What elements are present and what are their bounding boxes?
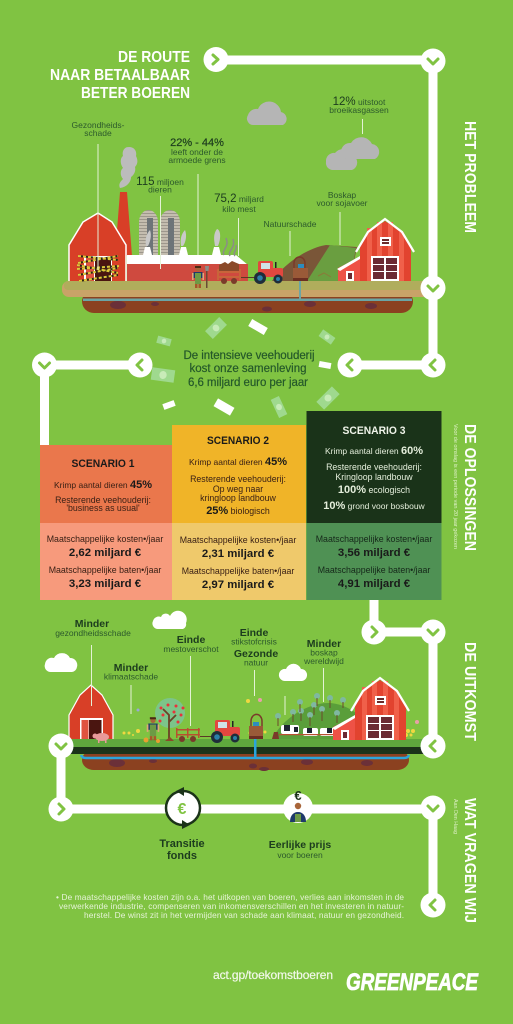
cost statement bbox=[184, 350, 314, 389]
label: 22-44%: 22% - 44% bbox=[170, 137, 224, 149]
label: 22-44%: leeft onder de bbox=[171, 147, 223, 157]
panel: scenario 2: Op weg naar bbox=[213, 484, 263, 494]
panel: scenario 1 bbox=[40, 445, 172, 600]
section label: wat vragen wij: WAT VRAGEN WIJ bbox=[461, 798, 478, 923]
ground platform bbox=[62, 281, 430, 313]
section label: de oplossingen: Voor de omslag is een periode van 20 jaar gekozen bbox=[452, 424, 458, 549]
label: einde stikstofcrisis, gezonde natuur bbox=[231, 627, 278, 696]
label: minder boskap wereldwijd: Minder bbox=[307, 638, 341, 650]
panel: scenario 3: Krimp aantal dieren 60% bbox=[325, 445, 423, 457]
apple tree bbox=[155, 698, 185, 741]
label: einde mestoverschot: Einde bbox=[177, 634, 205, 646]
well bbox=[249, 714, 263, 739]
label: eerlijke prijs: Eerlijke prijs bbox=[269, 839, 331, 851]
clouds: emissions bbox=[247, 102, 379, 170]
panel: scenario 3: Maatschappelijke baten•/jaar bbox=[318, 565, 430, 575]
white clouds bbox=[45, 611, 307, 681]
label: einde mestoverschot: mestoverschot bbox=[163, 644, 219, 654]
label: 12% uitstoot bbox=[329, 96, 389, 134]
label: minder klimaatschade: klimaatschade bbox=[104, 672, 158, 682]
label: gezondheidsschade bbox=[72, 120, 125, 270]
label: minder boskap wereldwijd: boskap bbox=[310, 648, 338, 658]
label: minder boskap wereldwijd bbox=[285, 638, 344, 715]
icon: fair price farmer: € bbox=[294, 788, 302, 803]
barn bbox=[332, 678, 409, 740]
label: 115 miljoen: dieren bbox=[148, 184, 172, 194]
problem scene bbox=[62, 147, 430, 313]
section label: het probleem: HET PROBLEEM bbox=[461, 121, 478, 233]
label: 115 miljoen bbox=[136, 176, 184, 269]
panel: scenario 3: 4,91 miljard € bbox=[338, 578, 411, 590]
tractor bbox=[211, 720, 240, 743]
panel: scenario 2: kringloop landbouw bbox=[200, 493, 277, 503]
logo: greenpeace: GREENPEACE bbox=[346, 969, 479, 996]
cost statement: 6,6 miljard euro per jaar bbox=[188, 377, 308, 389]
footnote: verwerkende industrie, compenseren van inkomensverschillen en het investeren in natuur- bbox=[59, 901, 404, 911]
section label: de oplossingen: DE OPLOSSINGEN bbox=[461, 424, 478, 551]
label: 75,2 miljard: kilo mest bbox=[222, 204, 256, 214]
section label: wat vragen wij bbox=[452, 798, 478, 923]
panel: scenario 3: SCENARIO 3 bbox=[342, 425, 406, 437]
well bbox=[293, 257, 308, 281]
label: boskap bbox=[316, 190, 368, 245]
label: einde mestoverschot bbox=[163, 634, 219, 726]
section label: de uitkomst: DE UITKOMST bbox=[461, 642, 478, 741]
ground platform bbox=[64, 739, 430, 771]
panel: scenario 2: Maatschappelijke baten•/jaar bbox=[182, 566, 294, 576]
barn with pig bbox=[69, 685, 113, 743]
label: transitie fonds: Transitie bbox=[159, 838, 205, 850]
panel: scenario 3: 10% grond voor bosbouw bbox=[323, 500, 426, 512]
label: einde stikstofcrisis, gezonde natuur: Einde bbox=[240, 627, 268, 639]
farmer with chickens bbox=[144, 717, 160, 743]
label: einde stikstofcrisis, gezonde natuur: natuur bbox=[244, 658, 268, 668]
farmer with shovel bbox=[192, 266, 209, 288]
sealed barn with tape bbox=[69, 213, 126, 281]
panel: scenario 1: Maatschappelijke baten•/jaar bbox=[49, 565, 161, 575]
icon: fair price farmer bbox=[283, 788, 313, 823]
panel: scenario 3: Kringloop landbouw bbox=[335, 472, 413, 482]
section label: wat vragen wij: Aan Den Haag bbox=[452, 799, 458, 834]
panel: scenario 3 bbox=[306, 411, 442, 600]
title: BETER BOEREN bbox=[81, 85, 190, 102]
panel: scenario 2: SCENARIO 2 bbox=[207, 435, 269, 447]
barn bbox=[337, 219, 414, 281]
footnote: • De maatschappelijke kosten zijn o.a. het uitkopen van boeren, verlies aan inkomsten in de bbox=[56, 892, 404, 902]
panel: scenario 2 bbox=[172, 425, 306, 600]
icon: transition fund bbox=[166, 787, 200, 829]
label: 22-44% bbox=[168, 137, 226, 255]
panel: scenario 2: 25% biologisch bbox=[206, 505, 270, 517]
panel: scenario 3: Maatschappelijke kosten•/jaar bbox=[316, 534, 432, 544]
label: eerlijke prijs: voor boeren bbox=[277, 850, 323, 860]
footnote: herstel. De winst zit in het vermijden van schade aan klimaat, natuur en gezondheid. bbox=[84, 910, 404, 920]
label: 12% uitstoot: 12% uitstoot bbox=[333, 96, 386, 108]
url: act.gp/toekomstboeren bbox=[213, 968, 333, 982]
route path lines bbox=[44, 60, 433, 905]
panel: scenario 2: Resterende veehouderij: bbox=[190, 474, 286, 484]
forest hill bbox=[272, 693, 356, 739]
panel: scenario 2: 2,31 miljard € bbox=[202, 548, 275, 560]
panel: scenario 1: SCENARIO 1 bbox=[72, 458, 134, 470]
outcome scene bbox=[64, 678, 430, 771]
cart bbox=[176, 728, 213, 742]
chimney with smoke bbox=[115, 147, 137, 256]
icon: transition fund: € bbox=[178, 801, 187, 818]
section label: de oplossingen bbox=[452, 424, 478, 551]
title: DE ROUTE bbox=[118, 49, 190, 66]
label: transitie fonds: fonds bbox=[167, 850, 197, 862]
cost statement: De intensieve veehouderij bbox=[184, 350, 314, 362]
label: 12% uitstoot: broeikasgassen bbox=[329, 105, 389, 115]
label: minder klimaatschade bbox=[104, 662, 158, 714]
label: eerlijke prijs bbox=[269, 839, 331, 860]
label: minder gezondheidsschade: gezondheidsschade bbox=[55, 628, 131, 638]
cows with fence bbox=[272, 725, 335, 739]
panel: scenario 2: 2,97 miljard € bbox=[202, 579, 275, 591]
label: minder boskap wereldwijd: wereldwijd bbox=[303, 656, 344, 666]
panel: scenario 1: 2,62 miljard € bbox=[69, 547, 142, 559]
label: 22-44%: armoede grens bbox=[168, 155, 226, 165]
hill with deforestation bbox=[272, 245, 357, 281]
label: 115 miljoen: 115 miljoen bbox=[136, 176, 184, 188]
factory bbox=[127, 229, 248, 281]
label: einde stikstofcrisis, gezonde natuur: Gezonde bbox=[234, 648, 278, 660]
label: einde stikstofcrisis, gezonde natuur: stikstofcrisis bbox=[231, 636, 277, 646]
route waypoints bbox=[32, 47, 446, 918]
label: 75,2 miljard bbox=[214, 193, 264, 256]
label: natuurschade: Natuurschade bbox=[264, 219, 317, 229]
flowers bbox=[122, 698, 419, 737]
panel: scenario 1: 3,23 miljard € bbox=[69, 578, 142, 590]
label: natuurschade bbox=[264, 219, 317, 256]
panel: scenario 3: 100% ecologisch bbox=[338, 484, 410, 496]
panel: scenario 2: Maatschappelijke kosten•/jaar bbox=[180, 535, 296, 545]
label: boskap: voor sojavoer bbox=[316, 198, 368, 208]
label: gezondheidsschade: schade bbox=[84, 128, 112, 138]
label: minder klimaatschade: Minder bbox=[114, 662, 148, 674]
label: transitie fonds bbox=[159, 838, 205, 862]
label: boskap: Boskap bbox=[328, 190, 356, 200]
tractor bbox=[254, 261, 283, 284]
manure cart bbox=[217, 261, 255, 284]
label: minder gezondheidsschade bbox=[55, 618, 131, 706]
label: minder gezondheidsschade: Minder bbox=[75, 618, 109, 630]
falling money bbox=[151, 317, 340, 418]
title bbox=[50, 49, 190, 102]
panel: scenario 2: Krimp aantal dieren 45% bbox=[189, 456, 287, 468]
panel: scenario 1: Maatschappelijke kosten•/jaar bbox=[47, 534, 163, 544]
panel: scenario 1: 'business as usual' bbox=[66, 503, 140, 513]
title: NAAR BETAALBAAR bbox=[50, 67, 190, 84]
label: gezondheidsschade: Gezondheids- bbox=[72, 120, 125, 130]
footnote bbox=[56, 892, 404, 920]
panel: scenario 3: Resterende veehouderij: bbox=[326, 462, 422, 472]
panel: scenario 1: Krimp aantal dieren 45% bbox=[54, 479, 152, 491]
silos bbox=[139, 210, 180, 255]
label: 75,2 miljard: 75,2 miljard bbox=[214, 193, 264, 205]
panel: scenario 1: Resterende veehouderij: bbox=[55, 495, 151, 505]
cost statement: kost onze samenleving bbox=[190, 363, 306, 375]
panel: scenario 3: 3,56 miljard € bbox=[338, 547, 411, 559]
